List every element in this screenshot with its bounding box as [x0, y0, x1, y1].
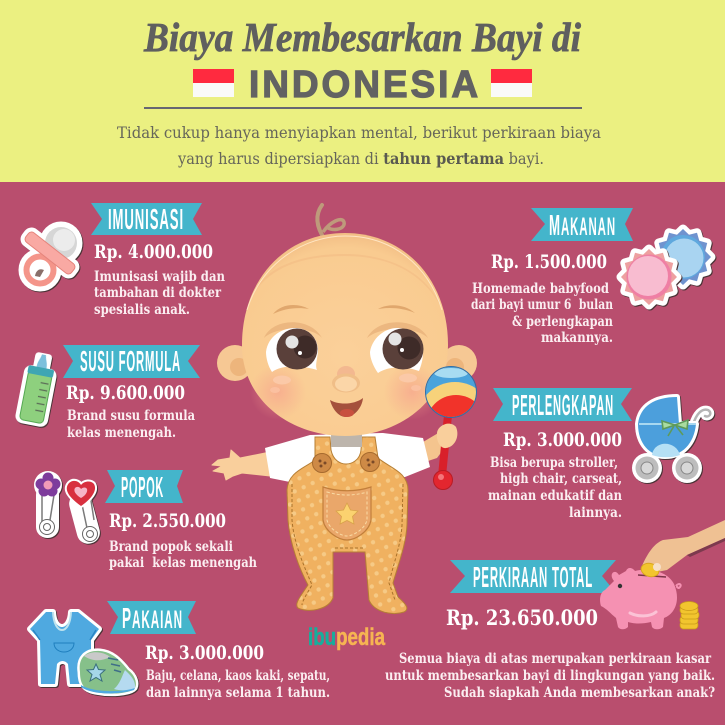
description: pakaian: Baju, celana, kaos kaki, sepatu, — [146, 668, 330, 684]
description: pakaian: dan lainnya selama 1 tahun. — [146, 685, 330, 701]
description: perlengkapan — [488, 455, 622, 521]
ribbon: susu formula — [63, 345, 200, 378]
amount: susu formula: Rp. 9.600.000 — [66, 383, 185, 404]
intro text — [117, 123, 601, 168]
header panel — [0, 0, 725, 182]
description: susu formula: Brand susu formula — [67, 408, 195, 424]
panel: perlengkapan — [488, 388, 710, 521]
right hand — [437, 424, 457, 448]
illustration: baby — [212, 205, 493, 614]
icon: coin stack — [680, 602, 699, 629]
description: imunisasi: spesialis anak. — [94, 302, 190, 318]
panel: popok — [34, 470, 257, 571]
icon: safety pin heart — [67, 481, 102, 546]
eyebrows — [273, 305, 415, 314]
ribbon: imunisasi: IMUNISASI — [108, 204, 184, 236]
icon: piggy bank — [600, 568, 681, 629]
description: makanan — [471, 281, 613, 346]
description: makanan: dari bayi umur 6 bulan — [471, 297, 613, 313]
panel: makanan — [471, 208, 711, 346]
baby ears — [217, 345, 477, 381]
ribbon: pakaian: PAKAIAN — [122, 603, 183, 635]
overalls — [287, 437, 408, 614]
icon: coin in slot — [640, 561, 661, 579]
description: total — [385, 651, 715, 701]
description: imunisasi — [94, 269, 225, 318]
icon: right flag — [491, 69, 532, 97]
rattle — [425, 366, 477, 490]
left arm — [212, 450, 270, 480]
logo: ibupedia: ibupedia — [308, 624, 386, 651]
title: country: INDONESIA — [249, 64, 481, 106]
right forearm — [423, 432, 446, 462]
panel: perkiraan total — [385, 520, 725, 701]
icon: hand with coin — [642, 520, 725, 572]
neck shadow — [331, 434, 362, 447]
icon: milk bottle — [18, 352, 57, 424]
description: pakaian — [146, 668, 330, 701]
icon: safety pin flower — [34, 471, 62, 538]
description: makanan: Homemade babyfood — [472, 281, 609, 297]
icon: stroller — [632, 397, 710, 483]
ribbon: perlengkapan — [493, 388, 632, 422]
text: SUSU FORMULA — [80, 346, 181, 378]
overalls pocket — [323, 487, 371, 540]
intro text: Tidak cukup hanya menyiapkan mental, berikut perkiraan biaya — [117, 123, 601, 142]
ribbon: pakaian — [107, 601, 196, 635]
mouth — [330, 398, 363, 417]
description: perlengkapan: high chair, carseat, — [500, 471, 622, 487]
icon: pacifier — [23, 226, 78, 287]
description: imunisasi: Imunisasi wajib dan — [94, 269, 225, 285]
amount: popok: Rp. 2.550.000 — [109, 511, 226, 532]
ribbon: makanan: MAKANAN — [549, 210, 616, 242]
description: susu formula — [67, 408, 195, 441]
description: makanan: makannya. — [541, 330, 613, 346]
overalls buttons — [312, 452, 380, 472]
icon: blue plate — [655, 229, 711, 285]
cheeks — [250, 364, 440, 420]
description: susu formula: kelas menengah. — [67, 425, 176, 441]
ribbon: popok: POPOK — [121, 472, 164, 504]
ribbon: popok — [105, 470, 183, 504]
nose — [332, 366, 360, 392]
description: popok — [109, 539, 257, 571]
intro text: yang harus dipersiapkan di tahun pertama bayi. — [177, 149, 544, 168]
ribbon: perkiraan total — [450, 560, 616, 594]
panel: pakaian — [30, 601, 330, 701]
description: perlengkapan: mainan edukatif dan — [488, 488, 622, 504]
baby hair curl — [317, 205, 350, 251]
icon: left flag — [193, 69, 234, 97]
panel: imunisasi — [23, 203, 225, 318]
panel: susu formula — [18, 345, 200, 441]
description: makanan: & perlengkapan — [512, 314, 613, 330]
amount: makanan: Rp. 1.500.000 — [491, 252, 607, 273]
icon: romper — [30, 612, 99, 684]
description: imunisasi: tambahan di dokter — [94, 285, 222, 301]
amount: total: Rp. 23.650.000 — [446, 605, 598, 630]
icon: pink plate — [621, 249, 677, 305]
amount: perlengkapan: Rp. 3.000.000 — [503, 430, 622, 451]
white shirt — [265, 433, 430, 482]
ribbon: imunisasi — [91, 203, 202, 236]
description: popok: Brand popok sekali — [109, 539, 233, 555]
left eye — [264, 322, 322, 372]
amount: pakaian: Rp. 3.000.000 — [145, 643, 264, 664]
description: perlengkapan: lainnya. — [569, 505, 622, 521]
right eye — [367, 322, 428, 373]
amount: imunisasi: Rp. 4.000.000 — [94, 242, 213, 263]
title: script line: Biaya Membesarkan Bayi di — [143, 14, 582, 60]
icon: shoe — [80, 651, 136, 694]
ribbon: makanan — [531, 208, 633, 242]
description: popok: pakai kelas menengah — [109, 555, 257, 571]
description: perlengkapan: Bisa berupa stroller, — [490, 455, 618, 471]
baby head — [242, 233, 448, 436]
